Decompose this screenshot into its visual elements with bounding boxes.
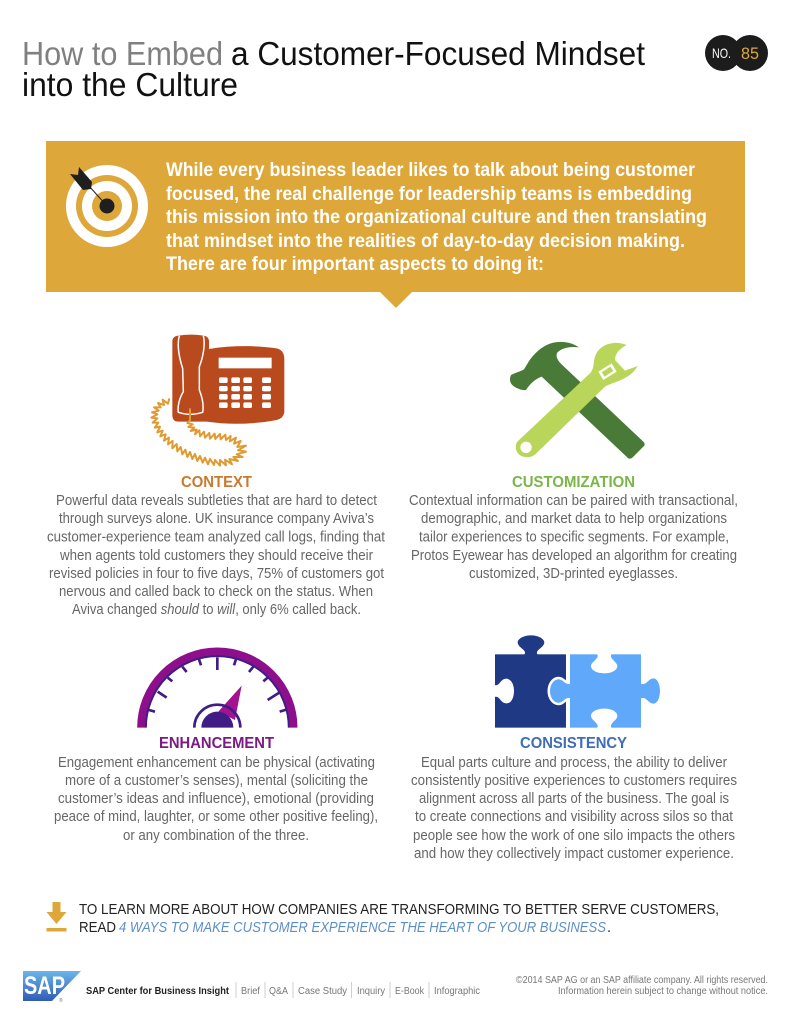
text: enhancement: or any combination of the three.	[123, 828, 309, 844]
text: customization: customized, 3D-printed eyeglasses.	[469, 566, 678, 582]
call to action: TO LEARN MORE ABOUT HOW COMPANIES ARE TRANSFORMING TO BETTER SERVE CUSTOMERS,	[79, 902, 719, 918]
panel: enhancement	[54, 735, 378, 844]
icon: download arrow	[46, 902, 66, 932]
text: consistency: to create connections and visibility across silos so that	[415, 809, 733, 825]
text: enhancement	[54, 755, 378, 844]
text: consistency: alignment across all parts of the business. The goal is	[419, 791, 729, 807]
copyright	[516, 975, 768, 997]
text: customization: demographic, and market data to help organizations	[421, 511, 727, 527]
text: context: nervous and called back to check on the status. When	[59, 584, 373, 600]
call to action	[79, 902, 719, 936]
heading: consistency: CONSISTENCY	[520, 735, 628, 752]
text: consistency: consistently positive experiences to customers requires	[411, 773, 737, 789]
intro text: There are four important aspects to doing it:	[166, 254, 544, 275]
footer navigation: Inquiry	[357, 986, 385, 997]
icon: target with dart	[66, 165, 148, 247]
text: enhancement: customer’s ideas and influence), emotional (providing	[58, 791, 374, 807]
panel: consistency	[411, 735, 737, 862]
icon: hammer and wrench	[510, 342, 645, 459]
text: consistency: and how they collectively impact customer experience.	[414, 846, 734, 862]
text: context	[47, 493, 385, 618]
icon: speedometer gauge	[141, 651, 293, 728]
text: context: through surveys alone. UK insurance company Aviva’s	[59, 511, 374, 527]
text: customization	[409, 493, 738, 582]
call to action: 4 WAYS TO MAKE CUSTOMER EXPERIENCE THE HEART OF YOUR BUSINESS	[119, 920, 606, 936]
call to action: READ	[79, 920, 116, 936]
issue number badge	[705, 35, 768, 71]
title: into the Culture	[22, 66, 238, 103]
text: context: customer-experience team analyzed call logs, finding that	[47, 530, 385, 546]
text: consistency	[411, 755, 737, 862]
copyright: ©2014 SAP AG or an SAP affiliate company. All rights reserved.	[516, 975, 768, 986]
text: context: revised policies in four to five days, 75% of customers got	[49, 566, 384, 582]
icon: puzzle pieces	[495, 635, 660, 728]
footer navigation: Q&A	[269, 986, 288, 997]
heading: customization: CUSTOMIZATION	[512, 474, 635, 491]
intro text: While every business leader likes to talk about being customer	[166, 160, 696, 181]
footer navigation: Case Study	[298, 986, 347, 997]
text: customization: Contextual information can be paired with transactional,	[409, 493, 738, 509]
intro text: focused, the real challenge for leadership teams is embedding	[166, 184, 692, 205]
text: context: Powerful data reveals subtleties that are hard to detect	[56, 493, 377, 509]
text: consistency: people see how the work of one silo impacts the others	[413, 828, 735, 844]
text: customization: tailor experiences to specific segments. For example,	[419, 530, 729, 546]
panel: intro callout	[46, 141, 745, 308]
footer navigation: Infographic	[434, 986, 480, 997]
heading: enhancement: ENHANCEMENT	[159, 735, 275, 752]
text: enhancement: more of a customer’s senses), mental (soliciting the	[65, 773, 368, 789]
intro text: this mission into the organizational culture and then translating	[166, 207, 707, 228]
text: context: when agents told customers they should receive their	[59, 548, 373, 564]
logo: SAP: ®	[59, 997, 63, 1004]
panel: context	[47, 474, 385, 618]
footer navigation: SAP Center for Business Insight	[86, 986, 230, 997]
text: consistency: Equal parts culture and process, the ability to deliver	[421, 755, 727, 771]
text: customization: Protos Eyewear has developed an algorithm for creating	[411, 548, 737, 564]
footer navigation	[86, 982, 480, 998]
logo: SAP: SAP	[24, 972, 65, 1000]
title: How to Embed	[22, 35, 223, 72]
footer navigation: Brief	[241, 986, 260, 997]
intro text	[166, 160, 707, 275]
call to action: .	[607, 920, 611, 936]
panel: customization	[409, 474, 738, 582]
copyright: Information herein subject to change without notice.	[558, 986, 768, 997]
issue number badge: 85	[741, 45, 759, 63]
text: enhancement: Engagement enhancement can be physical (activating	[58, 755, 375, 771]
issue number badge: NO.	[712, 45, 731, 61]
text: context: Aviva changed should to will, only 6% called back.	[72, 602, 361, 618]
icon: telephone	[151, 335, 284, 466]
text: enhancement: peace of mind, laughter, or some other positive feeling),	[54, 809, 378, 825]
title: a Customer-Focused Mindset	[231, 35, 645, 72]
footer navigation: E-Book	[395, 986, 425, 997]
heading: context: CONTEXT	[181, 474, 253, 491]
title	[22, 35, 645, 103]
intro text: that mindset into the realities of day-to-day decision making.	[166, 231, 685, 252]
